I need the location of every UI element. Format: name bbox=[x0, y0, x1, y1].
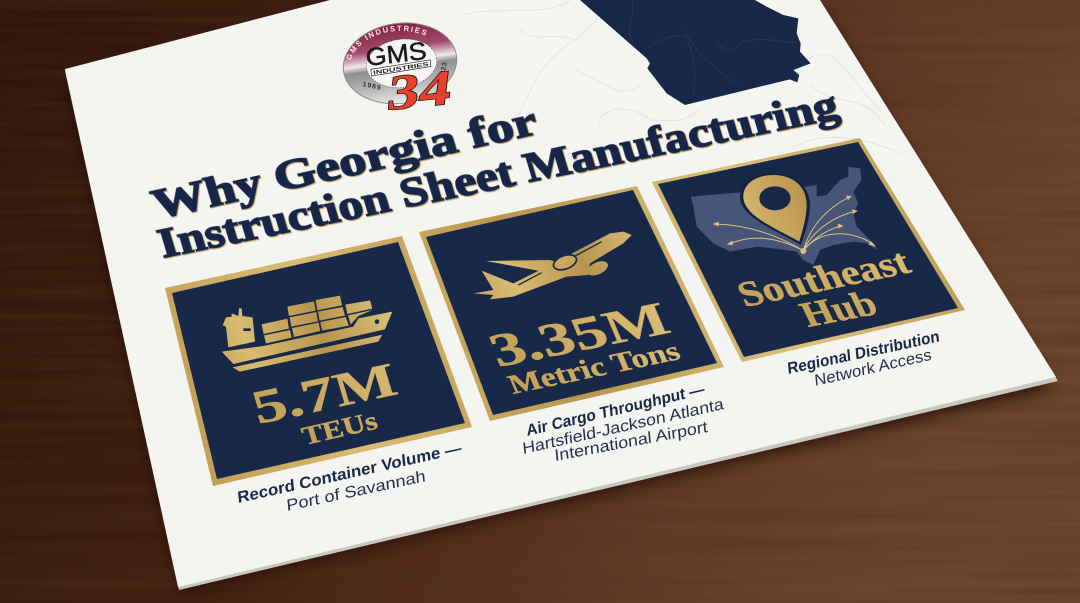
stat: 3.35M: 3.35M bbox=[482, 293, 677, 377]
icon: airplane bbox=[473, 232, 632, 299]
icon: US map with pin and arrows bbox=[691, 167, 877, 265]
stat unit: Metric Tons: Metric Tons bbox=[503, 336, 684, 400]
logo inner disc bbox=[363, 35, 440, 92]
panel: port of Savannah bbox=[165, 236, 472, 515]
US map bbox=[691, 167, 877, 265]
stat: 5.7M: 5.7M bbox=[246, 354, 403, 435]
arrowheads bbox=[713, 196, 876, 254]
caption 3: Regional Distribution bbox=[787, 328, 940, 378]
panel 2 frame bbox=[419, 186, 724, 421]
stat: Southeast: Southeast bbox=[731, 242, 917, 315]
caption 3: Network Access bbox=[814, 346, 932, 390]
pin hole bbox=[759, 186, 791, 210]
stat unit: TEUs: TEUs bbox=[298, 406, 381, 451]
caption 2: Hartsfield-Jackson Atlanta bbox=[522, 395, 725, 458]
title bbox=[146, 82, 844, 268]
caption 2: Air Cargo Throughput — bbox=[526, 380, 706, 440]
distribution arrows bbox=[715, 197, 874, 251]
title line 1: Why Georgia for bbox=[146, 97, 543, 229]
title line 2: Instruction Sheet Manufacturing bbox=[152, 82, 844, 268]
Georgia state silhouette bbox=[580, 0, 811, 105]
panel: air cargo bbox=[419, 186, 725, 465]
map pin bbox=[743, 175, 807, 242]
logo year right: 2023 bbox=[438, 61, 449, 80]
icon: container ship bbox=[222, 296, 392, 372]
stat: Hub: Hub bbox=[794, 283, 884, 335]
faint topographic map lines bbox=[462, 0, 905, 155]
panel 1 frame bbox=[165, 236, 472, 486]
logo: GMS Industries 34 bbox=[342, 22, 458, 121]
caption 2 bbox=[522, 380, 725, 465]
logo GMS wordmark: GMS bbox=[365, 38, 428, 72]
logo number 34: 34 bbox=[385, 59, 455, 121]
caption 2: International Airport bbox=[554, 418, 709, 465]
panel: southeast hub bbox=[652, 138, 965, 390]
caption 1: Port of Savannah bbox=[286, 467, 426, 515]
logo year left: 1989 bbox=[362, 81, 382, 92]
panel 3 frame bbox=[652, 138, 965, 362]
logo industries band: INDUSTRIES bbox=[373, 62, 429, 77]
logo ring bbox=[338, 16, 462, 111]
caption 1: Record Container Volume — bbox=[237, 439, 463, 507]
map pin shadow bbox=[740, 173, 810, 245]
logo ring top text: GMS INDUSTRIES bbox=[346, 26, 427, 60]
